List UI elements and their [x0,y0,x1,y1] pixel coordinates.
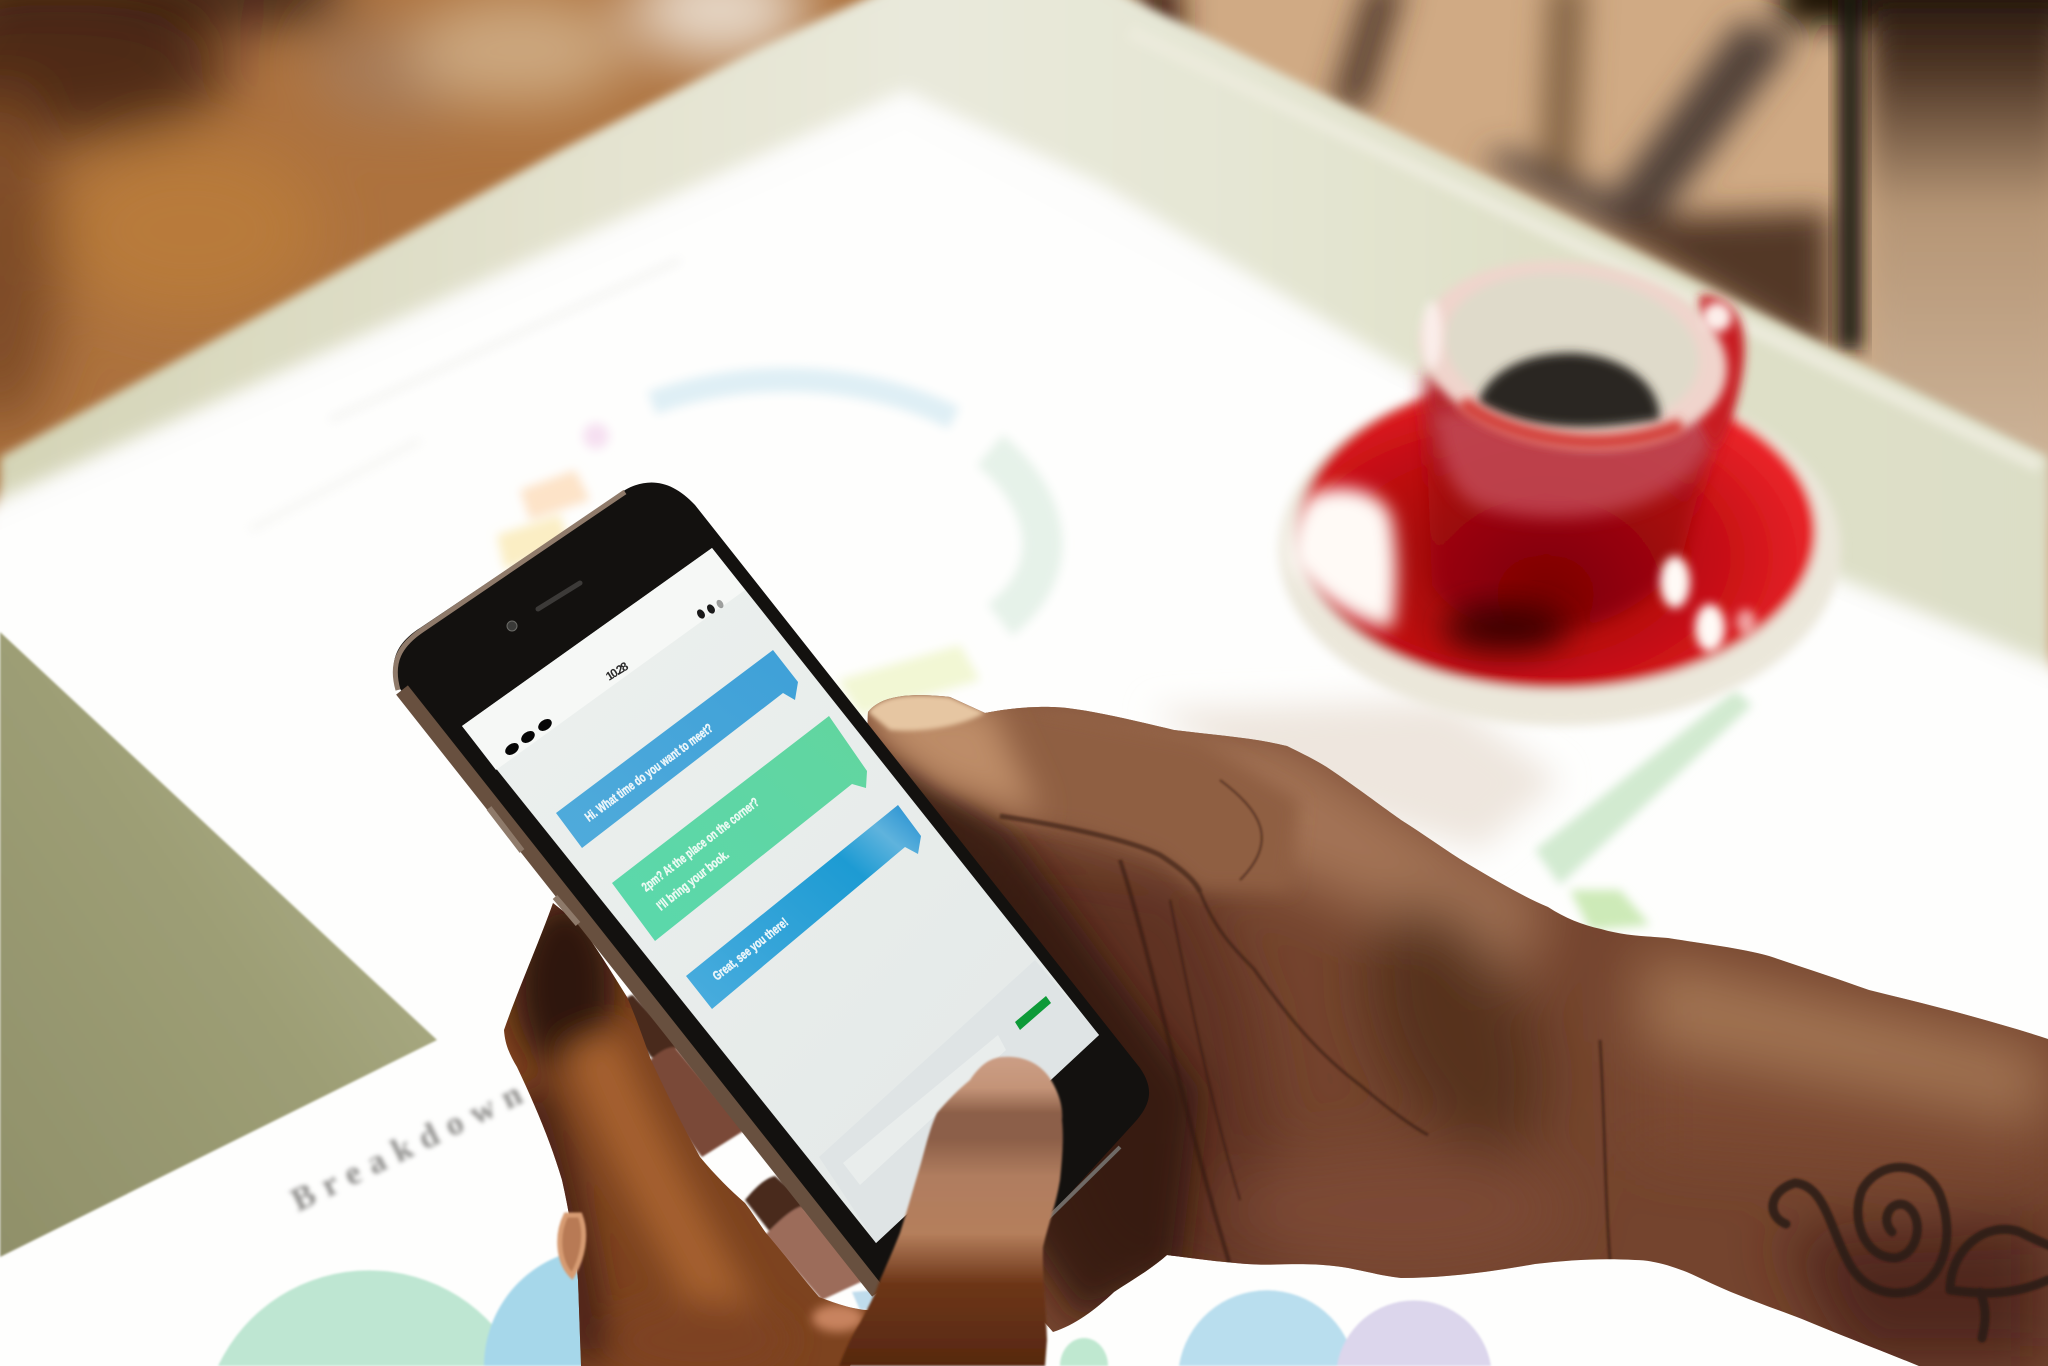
main left hand [504,903,868,1366]
faded text on paper [250,260,680,530]
message bubble 3: Great, see you there! [710,914,791,983]
cup body [1424,375,1728,633]
clock: 10.28 [603,659,631,684]
left hand shading [515,900,790,1366]
blurred wood floor background [0,0,1100,800]
thumb tip tone [860,700,1040,815]
signal indicator [695,599,725,620]
tattoo [1773,1167,2048,1338]
table edge highlight [1130,32,2040,466]
cup handle [1698,295,1744,450]
smartphone [394,482,1149,1292]
olive table section lower left [0,632,437,1257]
message bubble 2: I'll bring your book. [654,847,732,913]
hand creases [1000,780,1610,1265]
pale fingertip spot [812,1304,864,1332]
saucer reflection [1289,488,1396,628]
right thumb [860,700,1300,890]
finger two [645,1047,745,1157]
shaded paper below saucer [1150,700,1560,850]
menu dots [503,717,554,757]
hand shading [980,700,2048,1366]
light reflections [1422,301,1756,652]
blurred chairs background [1000,0,2048,900]
green chart strip on paper [1535,690,1752,930]
message bubble 2: 2pm? At the place on the corner? [639,794,762,894]
thumb nail [868,695,985,731]
small gap of chart colour [852,1290,880,1310]
input box [843,1035,1006,1185]
message bubble 2 [612,716,867,941]
coffee cup and saucer [1279,242,1841,726]
message bubble 3 [686,805,921,1009]
footer bar [819,960,1099,1243]
back fingers of left hand [619,995,880,1310]
side buttons [489,808,578,924]
header band [462,548,745,770]
send button [1015,996,1051,1030]
metal highlight [395,492,625,690]
message bubble 1 [556,650,798,848]
bubble chart on lower paper [218,1248,1491,1366]
coffee [1478,353,1660,427]
palm shadow along phone [880,740,1200,1320]
cup front lip [1462,402,1682,442]
phone metal left edge [402,690,878,1292]
lower right metal edge [1043,1147,1120,1223]
phone body [394,482,1149,1292]
cup shadow [1443,604,1567,652]
saucer [1279,374,1841,726]
finger three [745,1176,810,1232]
front camera [507,621,517,631]
left thumb over phone [839,1057,1063,1366]
screen [462,548,1099,1243]
speaker [538,583,580,609]
cup rim and interior [1409,242,1739,468]
ring [560,1215,584,1276]
finger four [765,1206,865,1300]
finger one [619,995,680,1060]
right hand [800,680,2048,1366]
cup reflection [1432,410,1722,517]
message bubble 1: Hi. What time do you want to meet? [582,720,716,824]
blurred paper heading: Breakdown [285,1075,528,1219]
faded donut chart on paper [497,380,1042,715]
